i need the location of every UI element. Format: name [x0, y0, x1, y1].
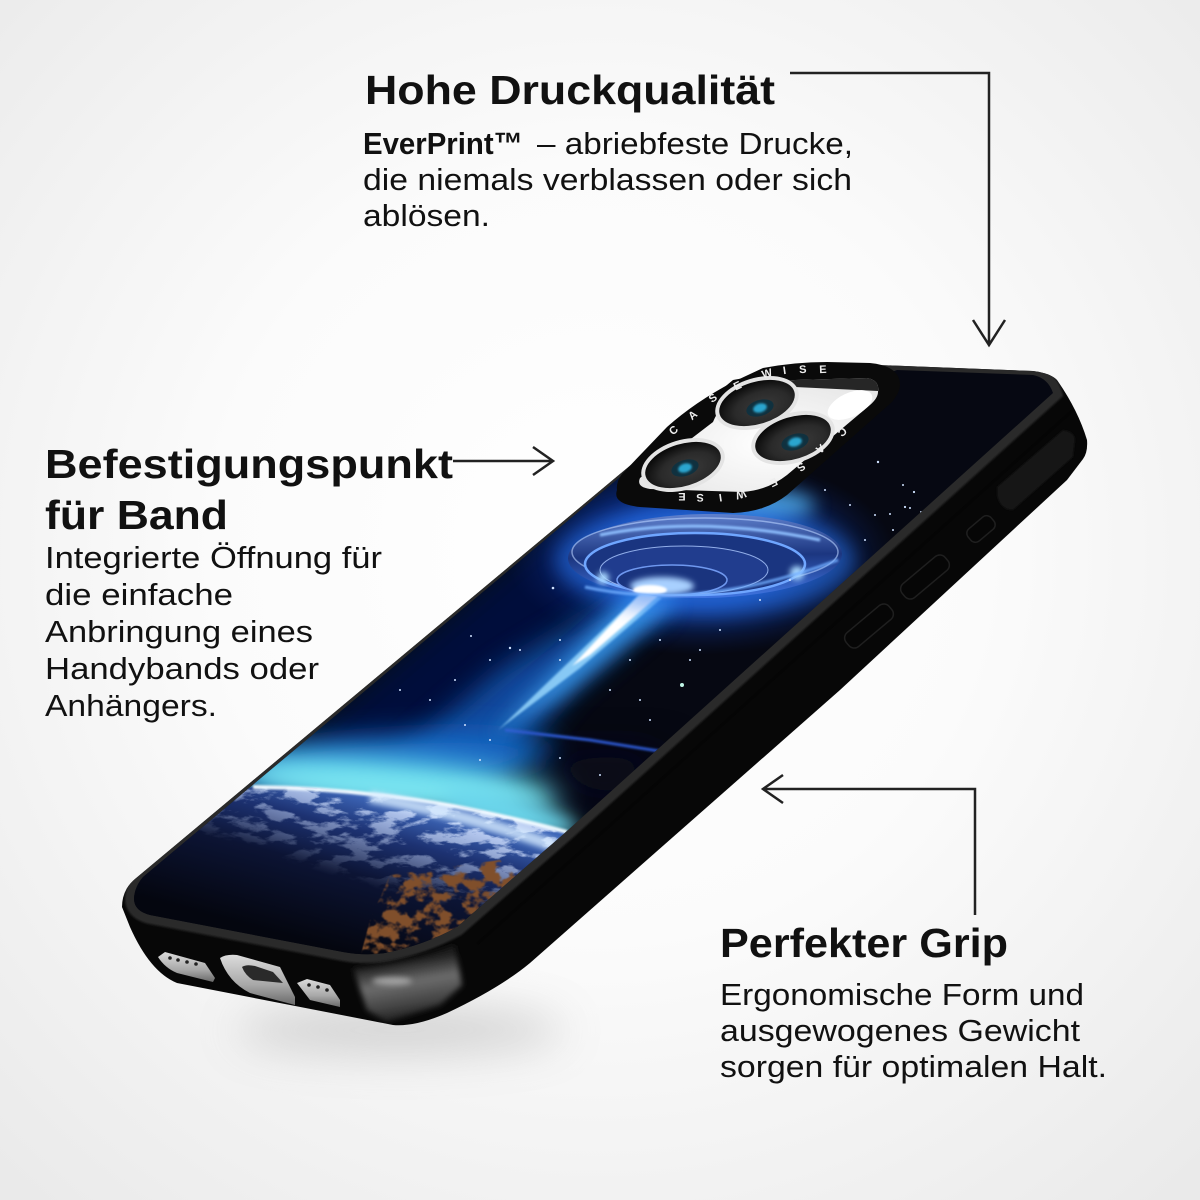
- bumper lettering bottom: C: [835, 424, 849, 438]
- side switch: [964, 513, 998, 545]
- case silhouette: [122, 363, 1087, 1025]
- body text: die niemals verblassen oder sich: [363, 162, 852, 197]
- camera island: [616, 362, 900, 513]
- bumper lettering bottom: S: [696, 491, 704, 503]
- phone case: [122, 363, 1087, 1025]
- flying saucer: [555, 505, 855, 615]
- lens left: [635, 429, 731, 501]
- bumper lettering bottom: A: [813, 441, 827, 455]
- bumper lettering bottom: W: [734, 487, 747, 501]
- volume button lower: [842, 601, 896, 651]
- bumper lettering top: E: [819, 364, 827, 376]
- body text: Integrierte Öffnung für: [45, 540, 382, 575]
- body text: [45, 540, 382, 723]
- bumper lettering top: I: [782, 365, 787, 377]
- bumper lettering top: S: [799, 364, 807, 376]
- dark wedge: [526, 740, 572, 812]
- heading: Hohe Druckqualität: [365, 67, 775, 113]
- phone back artwork: [134, 370, 1053, 954]
- bumper lettering top: A: [686, 409, 700, 423]
- cyan horizon glow: [214, 724, 556, 800]
- body text: Anhängers.: [45, 688, 217, 723]
- heading: [45, 441, 453, 538]
- navy field: [298, 478, 648, 750]
- lens top: [709, 367, 805, 439]
- bumper lettering bottom: E: [678, 490, 686, 502]
- earth: [134, 786, 565, 954]
- body text: sorgen für optimalen Halt.: [720, 1049, 1107, 1084]
- camera window: [639, 378, 878, 492]
- cloud texture: [200, 787, 558, 906]
- body text: – abriebfeste Drucke,: [537, 126, 853, 161]
- bumper lettering bottom: I: [718, 491, 723, 503]
- body text: Anbringung eines: [45, 614, 313, 649]
- land texture: [360, 860, 520, 958]
- body text: Handybands oder: [45, 651, 319, 686]
- arrow: strap mount: [453, 447, 553, 475]
- corner highlight: [372, 977, 412, 985]
- heading: Befestigungspunkt: [45, 441, 453, 487]
- blue glow band: [402, 594, 672, 782]
- bumper lettering bottom: E: [767, 475, 779, 489]
- bumper lettering bottom: [678, 424, 849, 503]
- body text: die einfache: [45, 577, 233, 612]
- side grip area: [997, 430, 1075, 510]
- stars: [399, 461, 931, 776]
- bumper lettering bottom: S: [794, 459, 807, 473]
- bumper lettering top: [667, 364, 827, 438]
- blue streak: [505, 730, 665, 752]
- body text: ausgewogenes Gewicht: [720, 1013, 1080, 1048]
- nebula glow: [520, 478, 883, 650]
- glossy corner: [353, 945, 462, 1022]
- body text: EverPrint™: [363, 126, 523, 161]
- bumper lettering top: W: [761, 367, 774, 381]
- bumper lettering top: C: [667, 424, 681, 438]
- bumper lettering top: S: [707, 392, 720, 406]
- atmosphere rim: [253, 787, 567, 832]
- body text: [720, 977, 1107, 1084]
- case lip: [134, 370, 1073, 954]
- heading: für Band: [45, 492, 228, 538]
- body text: ablösen.: [363, 198, 490, 233]
- body text: [363, 126, 853, 233]
- callout: strap mount: [45, 441, 453, 723]
- body text: Ergonomische Form und: [720, 977, 1084, 1012]
- arrow: print quality: [790, 73, 1005, 345]
- phone shadow: [235, 1006, 565, 1054]
- heading: Perfekter Grip: [720, 920, 1008, 966]
- arrow: grip: [763, 775, 975, 915]
- charging port: [220, 955, 295, 1005]
- bumper lettering top: E: [732, 379, 744, 393]
- lens right: [745, 402, 841, 474]
- callout: print quality: [363, 67, 853, 233]
- volume button upper: [898, 552, 952, 602]
- right speaker: [297, 979, 340, 1007]
- camera bumper: [616, 362, 900, 513]
- left speaker: [158, 952, 215, 982]
- light beam: [497, 594, 679, 734]
- callout: grip: [720, 920, 1107, 1084]
